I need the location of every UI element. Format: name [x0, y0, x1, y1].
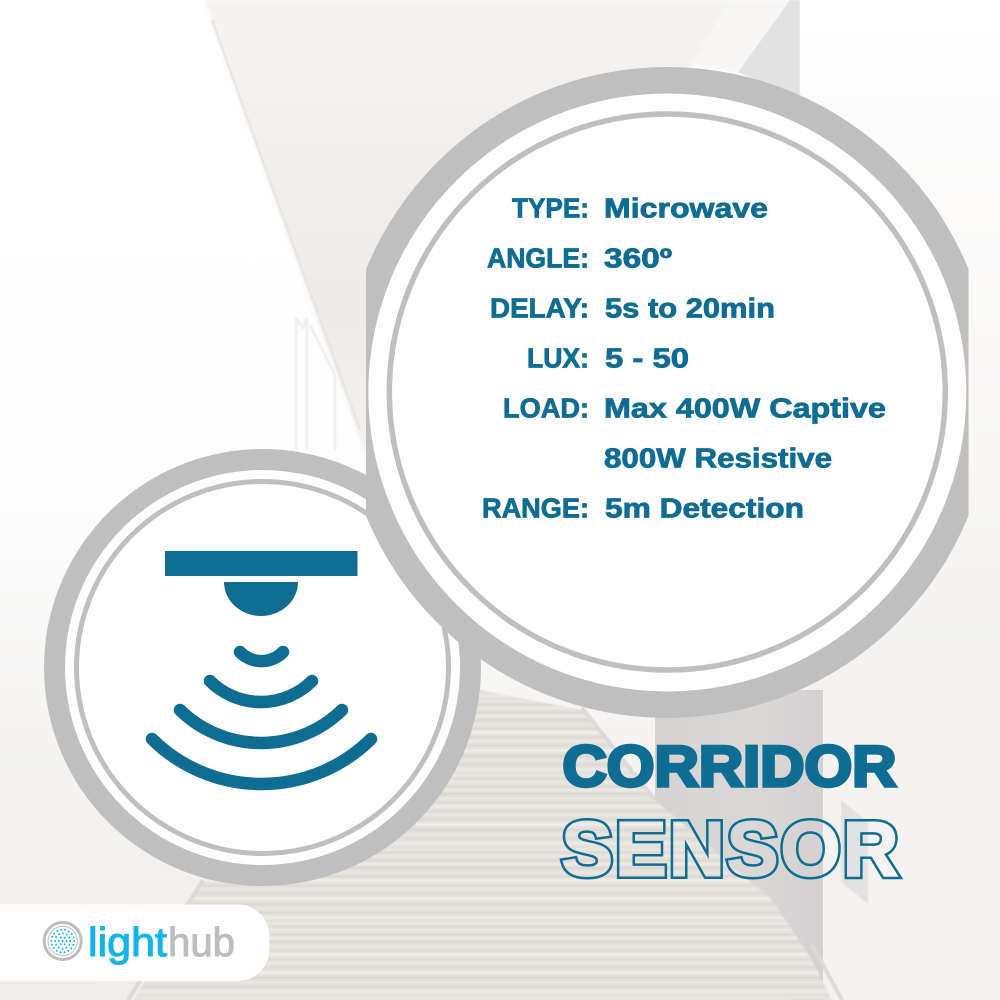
door: [655, 690, 823, 1000]
spec values: 5m Detection: [605, 493, 804, 524]
icon: lighthub logo mark: [44, 922, 81, 960]
spec labels: RANGE:: [482, 493, 589, 524]
logo wordmark: hub: [168, 919, 235, 965]
baseboards: [128, 708, 842, 1000]
carpet floor: [134, 690, 832, 1000]
ceiling crease: [212, 20, 360, 430]
title: [560, 744, 904, 880]
title: SENSOR: [562, 806, 898, 892]
spec labels: DELAY:: [490, 293, 589, 324]
logo badge: [0, 904, 270, 981]
spec values: 800W Resistive: [604, 443, 832, 474]
spec labels: ANGLE:: [487, 243, 589, 274]
large circle: specifications panel: [342, 67, 993, 718]
spec values: Microwave: [604, 193, 768, 224]
right wall: [800, 0, 1000, 700]
spec values: 360º: [604, 243, 672, 274]
wall plaque: [841, 800, 868, 904]
spec values: 5s to 20min: [605, 293, 775, 324]
spec labels: [482, 193, 589, 524]
spec values: Max 400W Captive: [604, 393, 886, 424]
spec values: 5 - 50: [605, 343, 689, 374]
logo wordmark: light: [88, 919, 168, 965]
spec labels: TYPE:: [512, 193, 589, 224]
ceiling: [205, 0, 733, 480]
title: CORRIDOR: [562, 735, 896, 799]
far door frame wedge: [738, 0, 800, 100]
left wall frame: [296, 318, 335, 450]
spec labels: LUX:: [527, 343, 589, 374]
small circle: sensor icon panel: [44, 449, 481, 886]
spec values: [604, 193, 886, 524]
icon: ceiling sensor with waves: [152, 551, 371, 784]
spec labels: LOAD:: [503, 393, 589, 424]
logo wordmark: [88, 919, 235, 965]
ceiling light band: [693, 0, 790, 72]
